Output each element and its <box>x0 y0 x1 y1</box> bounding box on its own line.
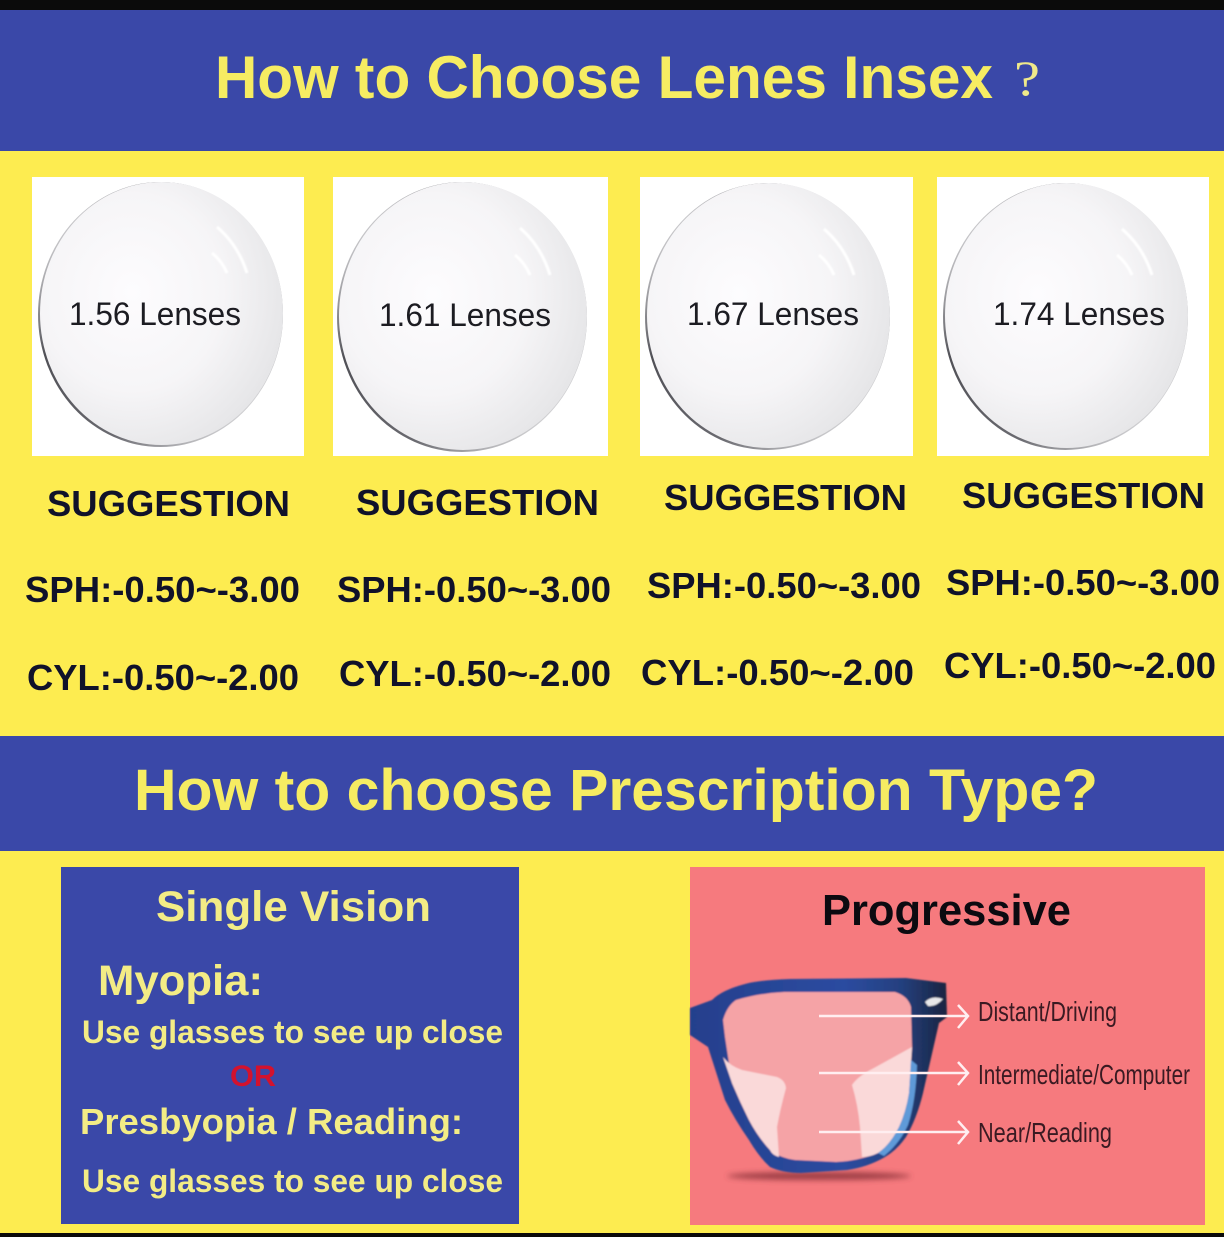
text: presbyopia description: Use glasses to see up close <box>82 1163 503 1199</box>
label: 1.56 Lenses: 1.56 Lenses <box>69 296 241 332</box>
label: 1.61 Lenses: 1.61 Lenses <box>379 297 551 333</box>
suggestion: 1.61 <box>337 482 611 694</box>
heading: Single Vision: Single Vision <box>156 883 431 931</box>
header band: prescription type <box>0 736 1224 851</box>
suggestion: 1.74: CYL:-0.50~-2.00 <box>944 645 1216 686</box>
title: How to Choose Lenes Insex: How to Choose Lenes Insex <box>215 44 993 111</box>
arrow: distant <box>819 1005 968 1028</box>
label: 1.74 Lenses: 1.74 Lenses <box>993 296 1165 332</box>
panel: 1.56 lens <box>32 177 304 456</box>
label: Distant/Driving: Distant/Driving <box>978 996 1117 1027</box>
suggestion: 1.67: SPH:-0.50~-3.00 <box>647 565 921 606</box>
panel: progressive <box>690 867 1205 1225</box>
heading: How to choose Prescription Type?: How to choose Prescription Type? <box>134 758 1098 823</box>
suggestion: 1.56: SPH:-0.50~-3.00 <box>25 569 300 610</box>
arrow: intermediate <box>819 1062 968 1085</box>
panel: 1.67 lens <box>640 177 913 456</box>
title: How to Choose Lenes Insex: ? <box>1014 50 1040 106</box>
suggestion: 1.67: CYL:-0.50~-2.00 <box>641 652 914 693</box>
suggestion: 1.56: SUGGESTION <box>47 483 290 524</box>
icon: glasses lens with progressive zones <box>690 978 947 1180</box>
heading: Myopia: Myopia: <box>98 957 263 1005</box>
panel: 1.61 lens <box>333 177 608 456</box>
suggestion: 1.61: SUGGESTION <box>356 482 599 523</box>
suggestion: 1.67: SUGGESTION <box>664 477 907 518</box>
heading: Progressive: Progressive <box>822 886 1071 935</box>
suggestion: 1.56: CYL:-0.50~-2.00 <box>27 657 299 698</box>
heading: Presbyopia / Reading: Presbyopia / Reading: <box>80 1101 463 1142</box>
suggestion: 1.74: SPH:-0.50~-3.00 <box>946 562 1220 603</box>
arrow: near <box>819 1121 968 1144</box>
panel: 1.74 lens <box>937 177 1209 456</box>
label: 1.67 Lenses: 1.67 Lenses <box>687 296 859 332</box>
header band: lens index <box>0 10 1224 151</box>
text: myopia description: Use glasses to see up close <box>82 1014 503 1050</box>
label: Near/Reading: Near/Reading <box>978 1117 1112 1148</box>
suggestion: 1.67 <box>641 477 921 693</box>
suggestion: 1.61: SPH:-0.50~-3.00 <box>337 569 611 610</box>
suggestion: 1.74 <box>944 475 1220 686</box>
suggestion: 1.74: SUGGESTION <box>962 475 1205 516</box>
suggestion: 1.56 <box>25 483 300 698</box>
suggestion: 1.61: CYL:-0.50~-2.00 <box>339 653 611 694</box>
text: OR: OR <box>230 1060 276 1093</box>
panel: single vision <box>61 867 519 1224</box>
